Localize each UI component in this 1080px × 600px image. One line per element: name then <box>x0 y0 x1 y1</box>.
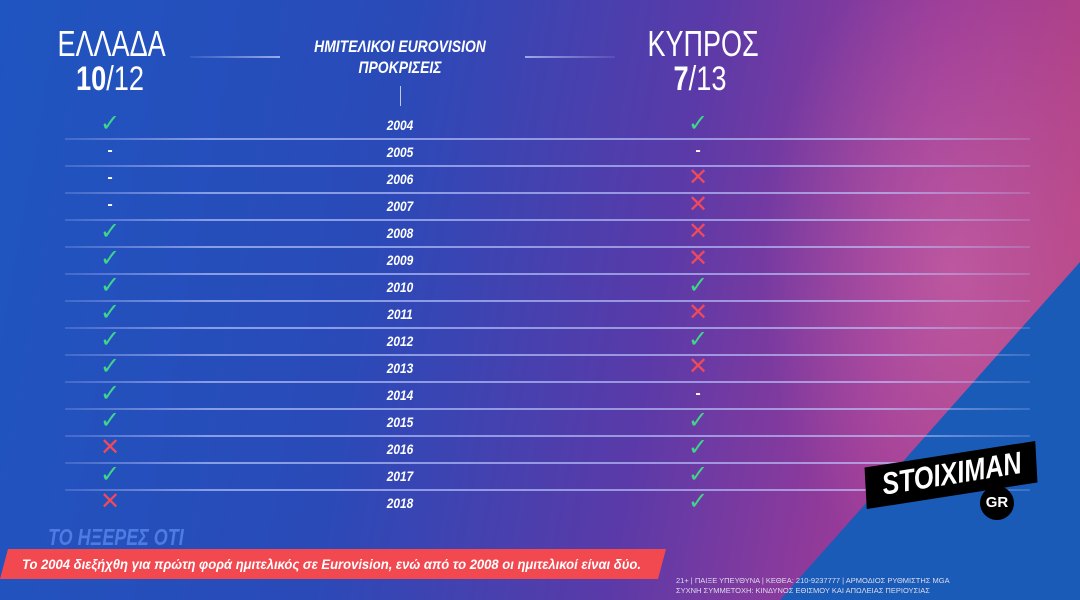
table rows: ✓ <box>100 218 120 245</box>
table rows: ✕ <box>688 299 708 326</box>
logo: Stoiximan GR <box>864 441 1038 520</box>
heading: Cyprus: 7/13 <box>674 60 726 98</box>
singer silhouette glow <box>760 0 1080 600</box>
table rows: - <box>107 142 113 159</box>
title <box>314 37 486 77</box>
table rows: ✕ <box>688 191 708 218</box>
table rows: ✓ <box>688 488 708 515</box>
table rows: 2016 <box>387 441 413 457</box>
did you know heading: ΤΟ ΗΞΕΡΕΣ ΟΤΙ <box>48 524 184 550</box>
table rows: - <box>695 385 701 402</box>
table rows: ✕ <box>688 245 708 272</box>
table rows: ✓ <box>688 272 708 299</box>
table rows: - <box>695 142 701 159</box>
table rows: 2015 <box>387 414 413 430</box>
heading: Greece: 10/12 <box>76 60 144 98</box>
table rows: 2007 <box>387 198 413 214</box>
red banner fact: Το 2004 διεξήχθη για πρώτη φορά ημιτελικός σε Eurovision, ενώ από το 2008 οι ημιτελικοί είναι δύο. <box>22 556 641 572</box>
table rows: ✕ <box>688 218 708 245</box>
table rows: 2013 <box>387 360 413 376</box>
table rows: ✓ <box>688 326 708 353</box>
table rows: ✓ <box>100 461 120 488</box>
table rows: ✓ <box>100 272 120 299</box>
table rows: ✓ <box>100 326 120 353</box>
disclaimer: 21+ | ΠΑΙΞΕ ΥΠΕΥΘΥΝΑ | ΚΕΘΕΑ: 210-9237777 | ΑΡΜΟΔΙΟΣ ΡΥΘΜΙΣΤΗΣ MGA <box>676 576 950 585</box>
table rows: 2010 <box>387 279 413 295</box>
table rows: ✓ <box>100 299 120 326</box>
table rows: ✕ <box>688 353 708 380</box>
table rows: 2008 <box>387 225 413 241</box>
table rows: 2009 <box>387 252 413 268</box>
table rows: ✓ <box>688 110 708 137</box>
table rows: 2017 <box>387 468 413 484</box>
heading: Cyprus: ΚΥΠΡΟΣ <box>648 23 759 64</box>
logo: Stoiximan GR: STOIXIMAN <box>879 445 1024 502</box>
logo: Stoiximan GR: GR <box>986 494 1008 511</box>
table rows: ✓ <box>100 407 120 434</box>
table rows: ✓ <box>100 245 120 272</box>
table rows: - <box>107 196 113 213</box>
table rows: - <box>107 169 113 186</box>
disclaimer: ΣΥΧΝΗ ΣΥΜΜΕΤΟΧΗ: ΚΙΝΔΥΝΟΣ ΕΘΙΣΜΟΥ ΚΑΙ ΑΠΩΛΕΙΑΣ ΠΕΡΙΟΥΣΙΑΣ <box>676 586 930 595</box>
table rows: ✓ <box>100 380 120 407</box>
heading: Greece: ΕΛΛΑΔΑ <box>58 23 166 64</box>
table rows: ✕ <box>688 164 708 191</box>
table rows: ✓ <box>100 353 120 380</box>
table rows: 2018 <box>387 495 413 511</box>
table rows: ✓ <box>100 110 120 137</box>
disclaimer <box>676 576 950 595</box>
table rows: 2005 <box>387 144 413 160</box>
table rows: 2011 <box>387 306 413 322</box>
title: ΗΜΙΤΕΛΙΚΟΙ EUROVISION <box>314 37 486 56</box>
table rows: ✓ <box>688 434 708 461</box>
table rows <box>65 110 1030 515</box>
heading: Cyprus <box>648 23 759 98</box>
table rows: ✓ <box>688 461 708 488</box>
heading: Greece <box>58 23 166 98</box>
table rows: ✕ <box>100 434 120 461</box>
title: ΠΡΟΚΡΙΣΕΙΣ <box>358 58 442 77</box>
table rows: 2004 <box>387 117 413 133</box>
table rows: 2012 <box>387 333 413 349</box>
table rows: ✓ <box>688 407 708 434</box>
table rows: ✕ <box>100 488 120 515</box>
table rows: 2014 <box>387 387 413 403</box>
table rows: 2006 <box>387 171 413 187</box>
red banner fact <box>0 549 666 579</box>
